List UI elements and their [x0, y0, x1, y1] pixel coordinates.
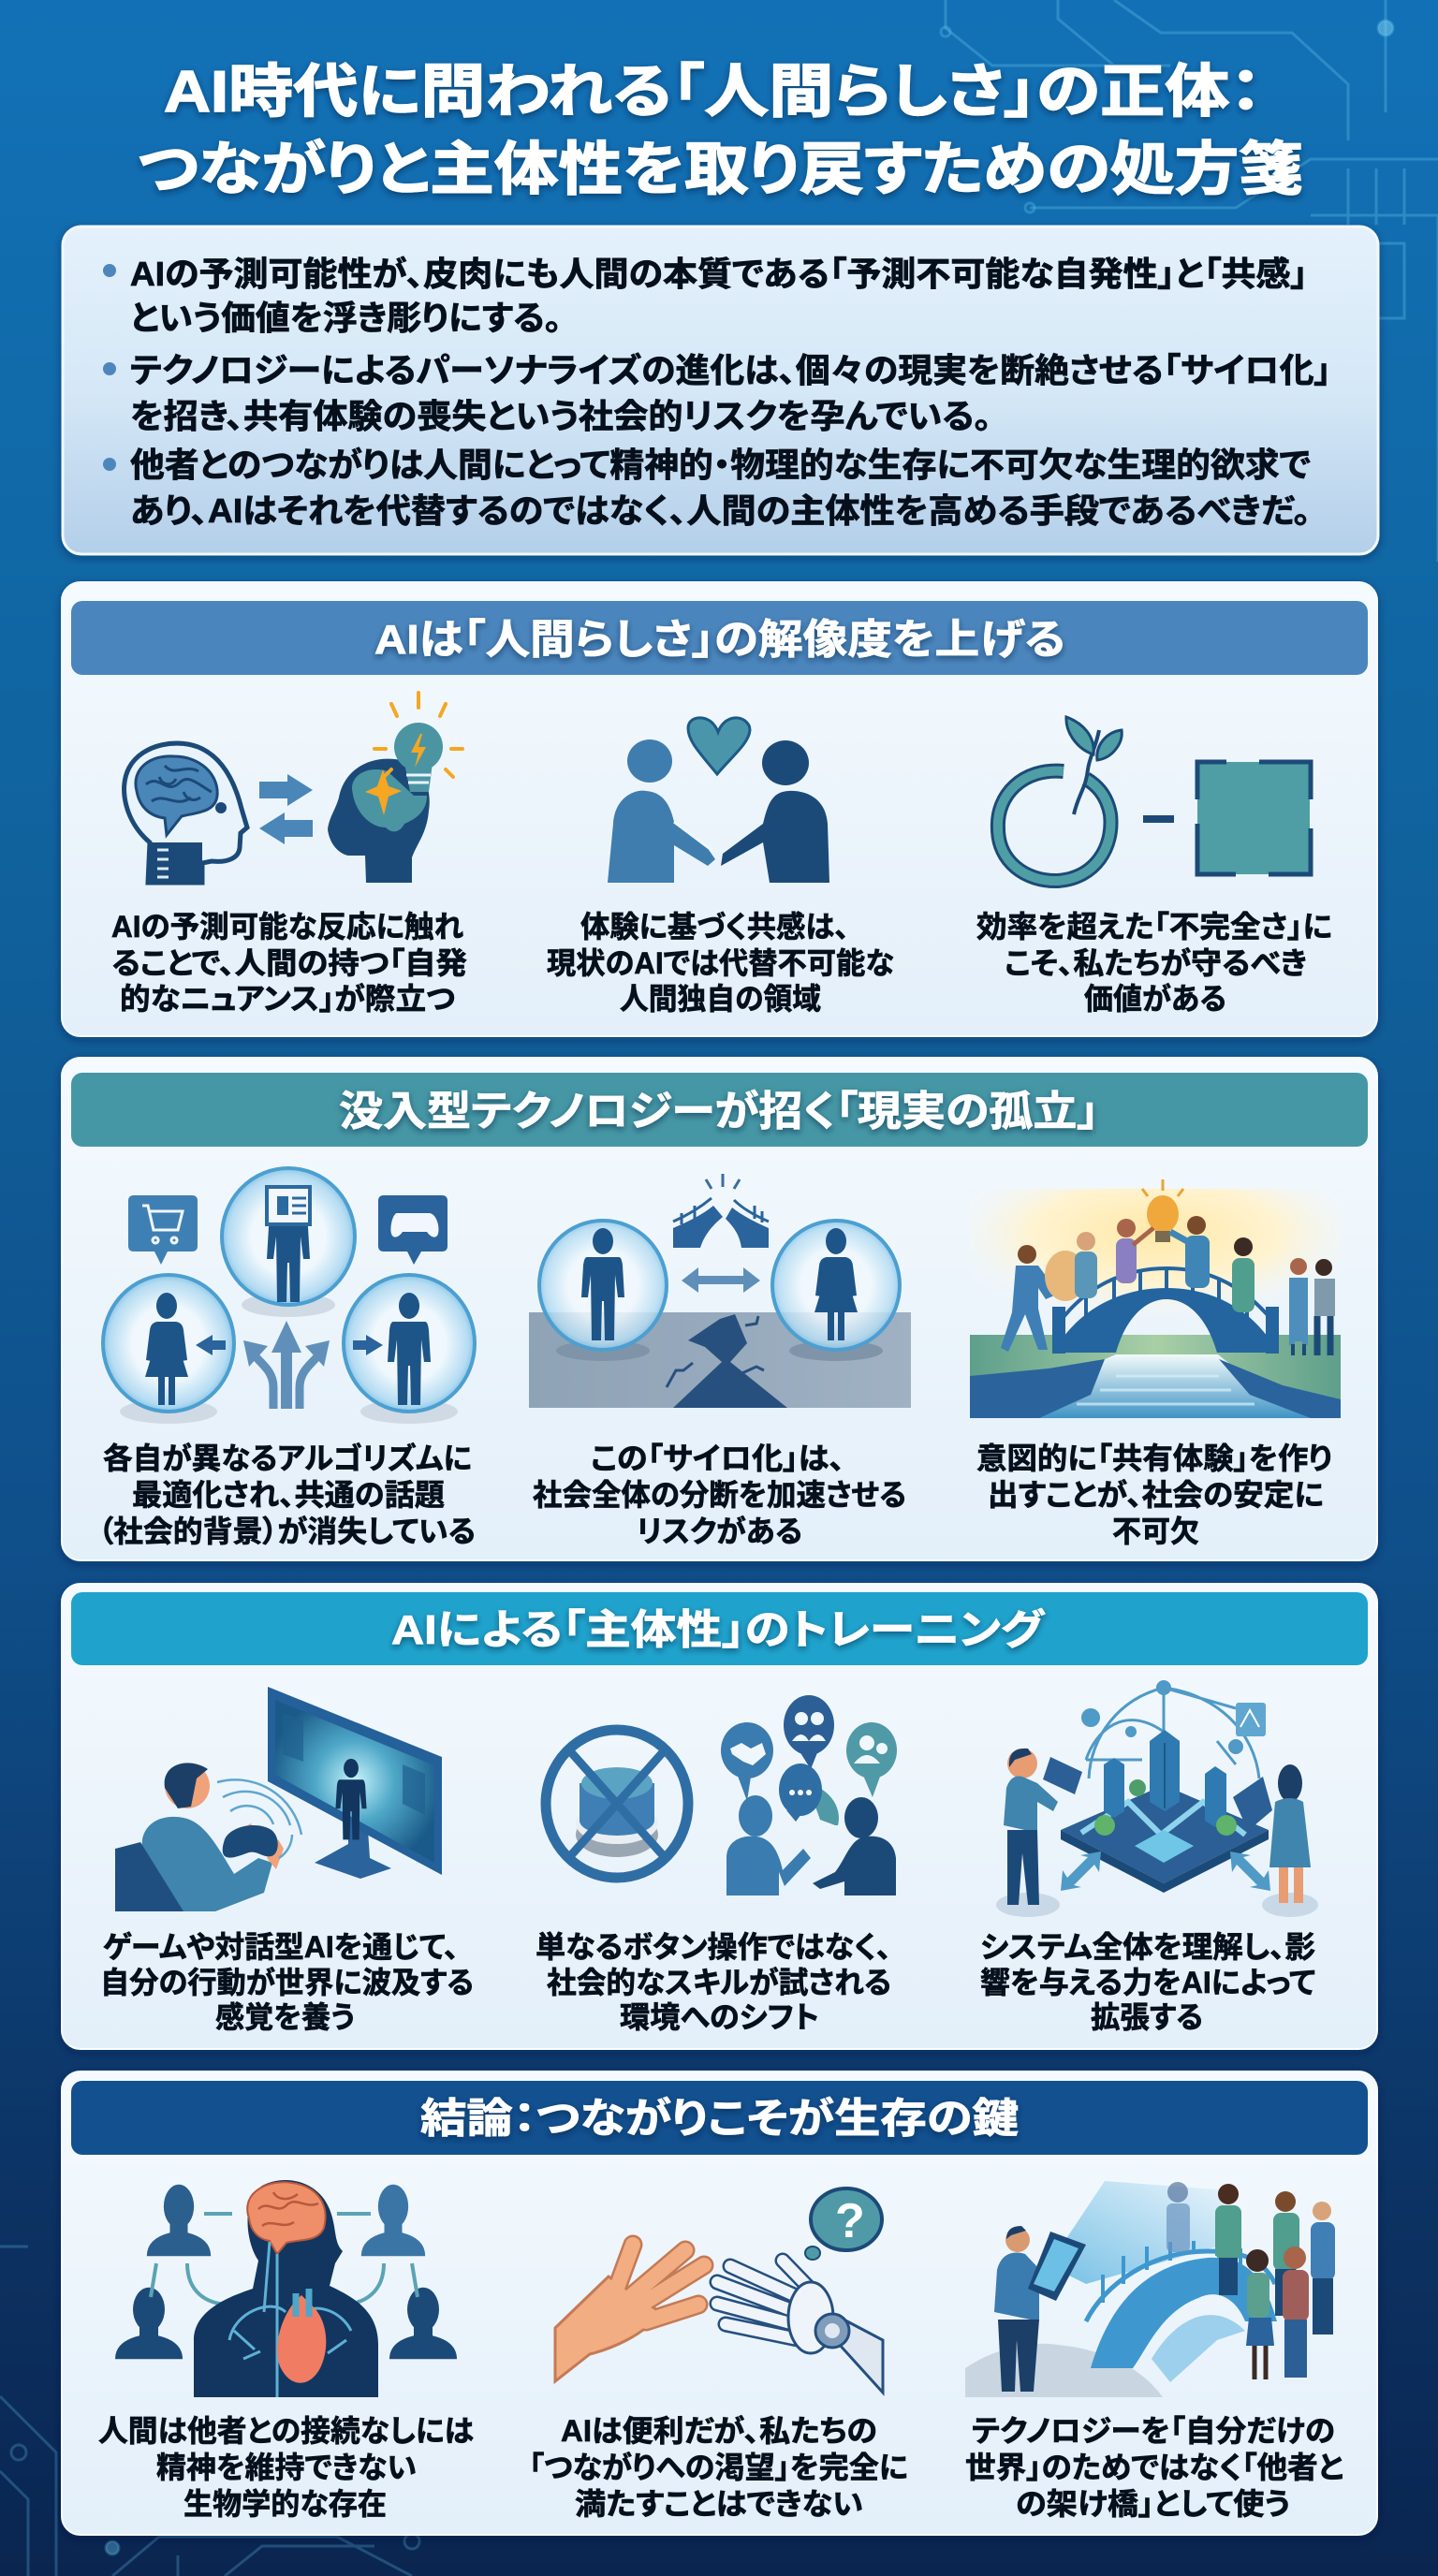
- text: column 3: [976, 1442, 1332, 1548]
- text: column 3: 出すことが、社会の安定に: [988, 1478, 1324, 1512]
- text: column 2: 単なるボタン操作ではなく、: [536, 1930, 891, 1964]
- icon: no button and social speech bubbles: [546, 1695, 897, 1895]
- text: column 2: [547, 910, 894, 1016]
- text: column 2: 社会全体の分断を加速させる: [533, 1478, 906, 1512]
- icon: bridge and shared experience scene: [970, 1179, 1341, 1418]
- icon: body with brain, heart and connected people: [115, 2180, 457, 2397]
- text: column 3: システム全体を理解し、影: [980, 1930, 1315, 1964]
- text: column 2: 現状のAIでは代替不可能な: [547, 946, 894, 980]
- panel: agency training: [62, 1584, 1377, 2049]
- text: column 3: 不可欠: [1112, 1515, 1199, 1548]
- text: column 3: [980, 1930, 1315, 2034]
- bullet list: という価値を浮き彫りにする。: [130, 299, 562, 337]
- heading bar: [71, 1592, 1368, 1665]
- panel: immersive tech isolation: [62, 1058, 1377, 1560]
- text: column 3: の架け橋」として使う: [1016, 2487, 1290, 2521]
- text: column 2: [536, 1930, 891, 2034]
- text: column 2: [529, 2414, 908, 2521]
- circuit pattern: top right: [941, 0, 1438, 562]
- text: column 3: テクノロジーを「自分だけの: [972, 2414, 1335, 2448]
- title: AI時代に問われる「人間らしさ」の正体：: [164, 60, 1262, 124]
- text: column 2: この「サイロ化」は、: [591, 1442, 844, 1475]
- icon: bridge connecting tablet user to people: [965, 2181, 1335, 2397]
- text: column 1: AIの予測可能な反応に触れ: [111, 910, 463, 944]
- icon: gamer and monitor: [115, 1687, 442, 1911]
- text: column 1: [100, 1930, 474, 2034]
- icon: city system model with two people: [996, 1680, 1318, 1917]
- title: [138, 60, 1303, 202]
- bullet list: テクノロジーによるパーソナライズの進化は、個々の現実を断絶させる「サイロ化」: [130, 351, 1331, 389]
- panel: summary: [63, 227, 1378, 554]
- text: column 1: 感覚を養う: [215, 2000, 355, 2034]
- title: つながりと主体性を取り戻すための処方箋: [138, 138, 1303, 202]
- heading bar: [71, 1073, 1368, 1147]
- text: column 2: 環境へのシフト: [620, 2000, 819, 2034]
- text: column 3: 響を与える力をAIによって: [980, 1966, 1315, 1999]
- text: column 1: ゲームや対話型AIを通じて、: [103, 1930, 459, 1964]
- text: column 1: 的なニュアンス」が際立つ: [120, 982, 455, 1016]
- text: column 3: 価値がある: [1084, 982, 1226, 1016]
- text: column 1: 生物学的な存在: [183, 2487, 387, 2521]
- text: column 2: 社会的なスキルが試される: [547, 1966, 891, 1999]
- text: column 3: 効率を超えた「不完全さ」に: [976, 910, 1332, 944]
- heading bar: AIによる「主体性」のトレーニング: [391, 1607, 1046, 1653]
- heading bar: [71, 2081, 1368, 2155]
- heading bar: [71, 601, 1368, 675]
- text: column 1: 最適化され、共通の話題: [132, 1478, 445, 1512]
- text: column 2: 「つながりへの渇望」を完全に: [529, 2451, 908, 2484]
- bullet list: 他者とのつながりは人間にとって精神的・物理的な生存に不可欠な生理的欲求で: [130, 446, 1311, 484]
- text: column 1: 精神を維持できない: [156, 2451, 417, 2484]
- text: column 1: [98, 1442, 476, 1548]
- text: column 2: 人間独自の領域: [620, 982, 821, 1016]
- text: column 2: [533, 1442, 906, 1548]
- text: column 1: 各自が異なるアルゴリズムに: [103, 1442, 472, 1475]
- text: column 1: （社会的背景）が消失している: [98, 1515, 476, 1548]
- text: column 1: [98, 2414, 474, 2521]
- bullet list: [103, 255, 1331, 530]
- text: column 1: ることで、人間の持つ「自発: [111, 946, 467, 980]
- text: column 2: 満たすことはできない: [575, 2487, 863, 2521]
- panel: resolution of humanity: [62, 582, 1377, 1036]
- text: column 3: 拡張する: [1091, 2000, 1203, 2034]
- icon: silo isolation with cracked ground: [529, 1174, 911, 1408]
- heading bar: 没入型テクノロジーが招く「現実の孤立」: [339, 1089, 1099, 1134]
- heading bar: 結論：つながりこそが生存の鍵: [420, 2096, 1019, 2142]
- icon: handshake with heart: [608, 718, 829, 883]
- text: column 1: [111, 910, 467, 1016]
- bullet list: AIの予測可能性が、皮肉にも人間の本質である「予測不可能な自発性」と「共感」: [130, 255, 1308, 293]
- text: column 2: AIは便利だが、私たちの: [561, 2414, 877, 2448]
- text: column 3: [965, 2414, 1343, 2521]
- bullet list: を招き、共有体験の喪失という社会的リスクを孕んでいる。: [130, 397, 991, 435]
- heading bar: AIは「人間らしさ」の解像度を上げる: [374, 617, 1065, 663]
- text: column 2: 体験に基づく共感は、: [580, 910, 849, 944]
- icon: filter bubbles with algorithm arrows: [103, 1168, 475, 1424]
- bullet list: あり、AIはそれを代替するのではなく、人間の主体性を高める手段であるべきだ。: [130, 491, 1311, 530]
- text: column 1: 人間は他者との接続なしには: [98, 2414, 474, 2448]
- text: column 3: こそ、私たちが守るべき: [1005, 946, 1307, 980]
- text: column 3: 世界」のためではなく「他者と: [965, 2451, 1343, 2484]
- text: column 3: 意図的に「共有体験」を作り: [976, 1442, 1332, 1475]
- icon: human hand and robot hand with question: [555, 2188, 883, 2393]
- icon: imperfect sprout circle and square: [998, 717, 1311, 881]
- icon: AI head and human head exchange: [125, 693, 462, 883]
- text: column 3: [976, 910, 1332, 1016]
- panel: conclusion: [62, 2071, 1377, 2535]
- icon: human hand and robot hand with question: ?: [835, 2194, 865, 2248]
- circuit pattern: bottom left: [0, 2247, 419, 2576]
- text: column 1: 自分の行動が世界に波及する: [100, 1966, 474, 1999]
- text: column 2: リスクがある: [637, 1515, 802, 1548]
